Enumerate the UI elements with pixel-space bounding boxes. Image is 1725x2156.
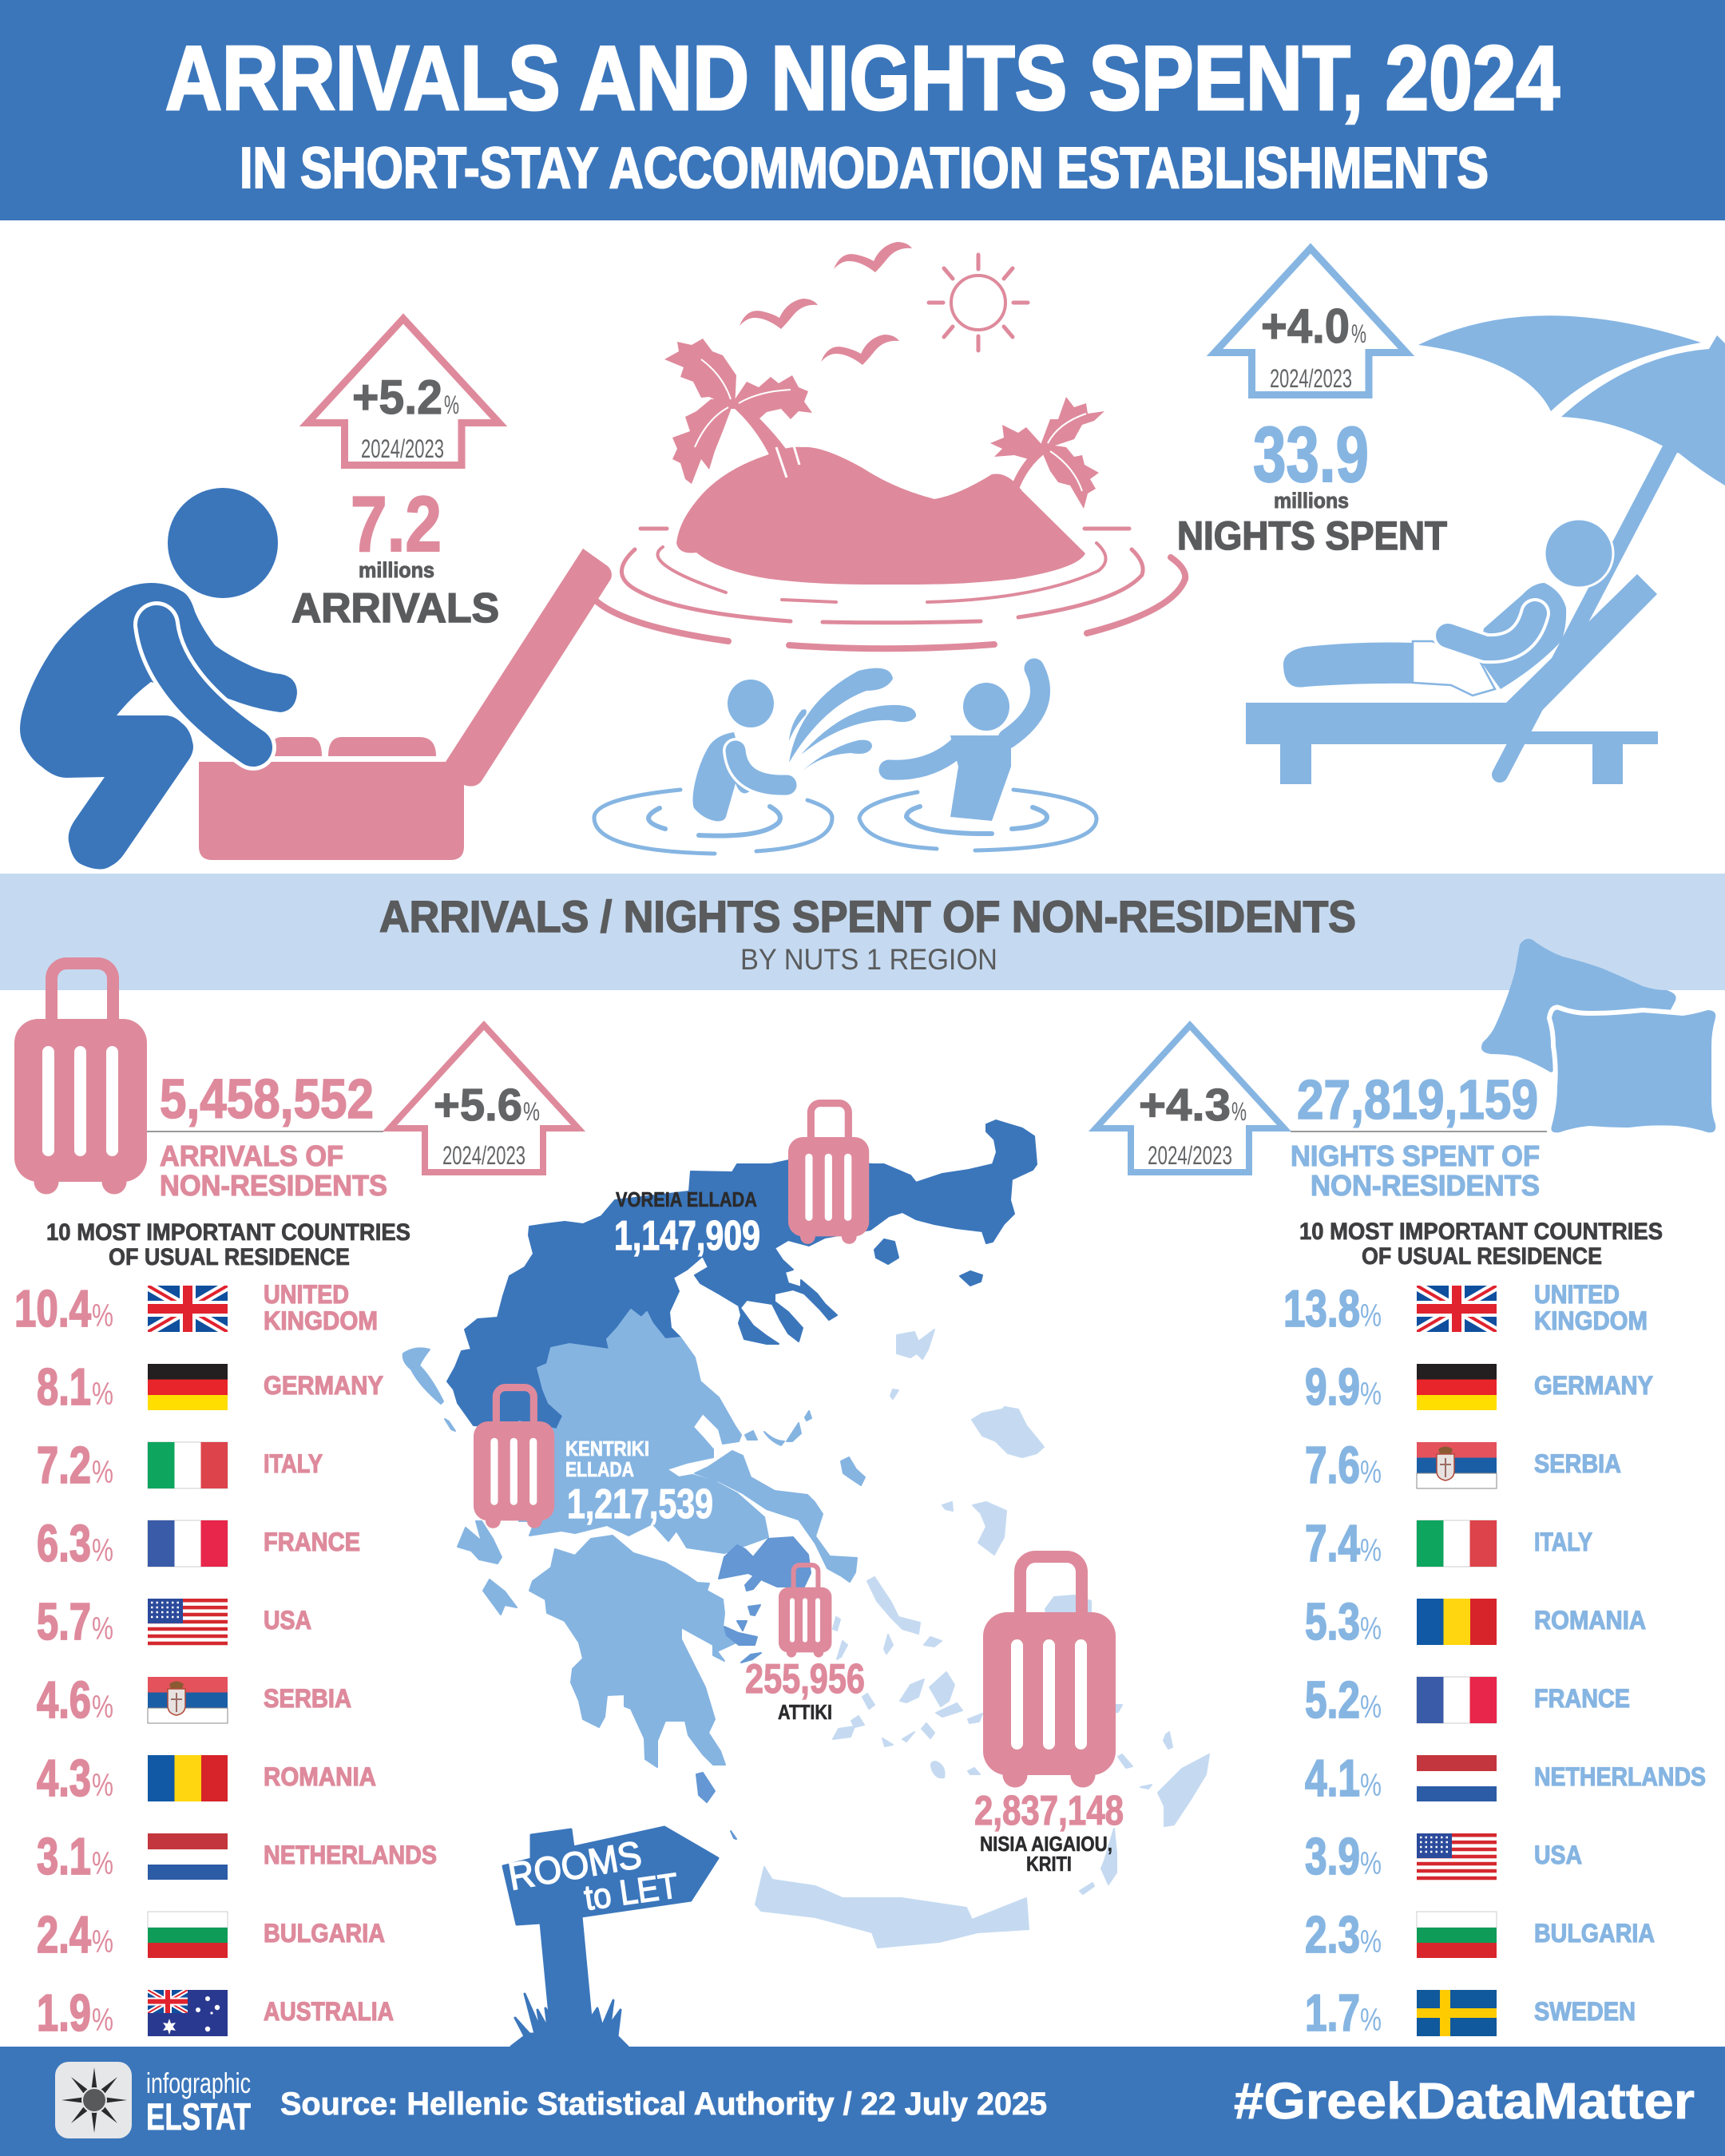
suitcase: Attiki xyxy=(779,1565,831,1658)
row: Serbia: 7.6 xyxy=(1305,1436,1360,1494)
row: Serbia: % xyxy=(92,1690,113,1725)
row: Germany xyxy=(1305,1357,1653,1416)
map label: Kentriki Ellada: ELLADA xyxy=(565,1457,634,1481)
row: United Kingdom: 13.8 xyxy=(1283,1279,1360,1338)
map label: Nisia Aigaiou, Kriti: 2,837,148 xyxy=(974,1788,1124,1834)
logo wordmark xyxy=(146,2067,251,2138)
person xyxy=(20,488,297,870)
arrivals figure xyxy=(291,480,499,632)
left panel: arrivals of non-residents xyxy=(14,963,578,2042)
arrow: non-resident nights change: % xyxy=(1231,1097,1247,1126)
row: Germany: GERMANY xyxy=(1534,1371,1653,1400)
row: France: FRANCE xyxy=(1534,1684,1630,1713)
birds xyxy=(740,242,912,365)
row: Italy: % xyxy=(92,1455,113,1490)
logo wordmark: infographic xyxy=(146,2067,251,2099)
row: Serbia: SERBIA xyxy=(1534,1449,1621,1478)
row: Romania: ROMANIA xyxy=(264,1762,376,1791)
row: Romania: ROMANIA xyxy=(1534,1606,1646,1635)
nights figure: NIGHTS SPENT xyxy=(1177,513,1447,558)
row: United Kingdom: UNITED xyxy=(264,1280,349,1309)
reclining person xyxy=(1283,519,1613,696)
countries heading xyxy=(46,1219,410,1270)
map label: Nisia Aigaiou, Kriti xyxy=(974,1788,1124,1876)
arrow: arrivals change: % xyxy=(444,390,459,419)
countries heading xyxy=(1299,1219,1663,1270)
row: France xyxy=(37,1514,360,1572)
icon: rooms to let sign xyxy=(503,1827,718,2047)
row: Bulgaria: BULGARIA xyxy=(264,1919,385,1948)
region: Kentriki Ellada xyxy=(403,1310,865,1615)
row: Serbia xyxy=(1305,1436,1621,1494)
arrow: non-resident arrivals change: +5.6 xyxy=(434,1080,522,1131)
row: Australia: % xyxy=(92,2003,113,2038)
nights figure: millions xyxy=(1274,489,1349,513)
row: USA: % xyxy=(92,1611,113,1647)
row: France: 5.2 xyxy=(1305,1671,1360,1729)
row: USA: 3.9 xyxy=(1305,1827,1360,1885)
map of Greece xyxy=(403,1120,1209,1948)
map label: Attiki: 255,956 xyxy=(745,1656,865,1702)
row: Italy: ITALY xyxy=(1534,1528,1592,1556)
suitcase xyxy=(199,549,612,860)
countries heading: 10 MOST IMPORTANT COUNTRIES xyxy=(1299,1219,1663,1245)
row: Italy xyxy=(37,1436,323,1494)
suitcase: Nisia Aigaiou, Kriti xyxy=(983,1557,1116,1787)
arrow: non-resident arrivals change: 2024/2023 xyxy=(442,1141,525,1170)
row: Sweden: SWEDEN xyxy=(1534,1997,1636,2026)
row: United Kingdom: KINGDOM xyxy=(1534,1306,1648,1335)
row: Germany: % xyxy=(1360,1377,1382,1412)
row: Italy xyxy=(1305,1514,1592,1572)
icon: pillows xyxy=(1481,939,1715,1132)
icon: rooms to let sign: ROOMS xyxy=(506,1833,644,1899)
row: Italy: 7.4 xyxy=(1305,1514,1360,1572)
sun lounger xyxy=(1246,574,1658,784)
arrivals figure: 7.2 xyxy=(351,480,442,568)
arrow: non-resident arrivals change: % xyxy=(523,1097,540,1126)
country list xyxy=(14,1279,437,2042)
arrow: non-resident arrivals change xyxy=(390,1025,578,1172)
row: USA: % xyxy=(1360,1846,1382,1881)
icon: rooms to let sign: to LET xyxy=(582,1866,680,1918)
row: Romania: 4.3 xyxy=(37,1749,91,1807)
subtitle: IN SHORT-STAY ACCOMMODATION ESTABLISHMENTS xyxy=(240,137,1489,200)
map label: Nisia Aigaiou, Kriti: NISIA AIGAIOU, xyxy=(980,1832,1112,1856)
row: USA: 5.7 xyxy=(37,1592,91,1651)
row: United Kingdom xyxy=(14,1279,378,1338)
map label: Kentriki Ellada xyxy=(565,1437,713,1528)
row: Netherlands xyxy=(1305,1749,1706,1807)
country list xyxy=(1283,1279,1706,2042)
arrow: nights change: % xyxy=(1351,319,1366,348)
arrivals figure: ARRIVALS xyxy=(291,585,499,632)
row: USA xyxy=(37,1592,311,1651)
row: Bulgaria xyxy=(1305,1905,1655,1964)
row: Australia xyxy=(37,1984,394,2042)
row: United Kingdom: UNITED xyxy=(1534,1280,1620,1309)
arrow: nights change: 2024/2023 xyxy=(1270,364,1352,393)
row: United Kingdom: KINGDOM xyxy=(264,1306,378,1335)
arrow: arrivals change: 2024/2023 xyxy=(361,434,444,463)
row: Germany: 9.9 xyxy=(1305,1357,1360,1416)
row: France xyxy=(1305,1671,1630,1729)
row: Sweden: 1.7 xyxy=(1305,1984,1360,2042)
row: Netherlands: 4.1 xyxy=(1305,1749,1360,1807)
section band xyxy=(0,874,1725,990)
row: France: % xyxy=(1360,1690,1382,1725)
countries heading: OF USUAL RESIDENCE xyxy=(109,1244,350,1270)
arrow: nights change: +4.0 xyxy=(1261,299,1350,353)
map label: Kentriki Ellada: KENTRIKI xyxy=(565,1437,649,1460)
row: Italy: 7.2 xyxy=(37,1436,91,1494)
suitcase: Kentriki Ellada xyxy=(474,1388,554,1528)
icon: island with palm trees xyxy=(597,242,1185,648)
countries heading: 10 MOST IMPORTANT COUNTRIES xyxy=(46,1219,410,1246)
suitcase: Voreia Ellada xyxy=(788,1104,869,1244)
row: Germany: GERMANY xyxy=(264,1371,383,1400)
region: Nisia Aigaiou, Kriti xyxy=(755,1330,1209,1948)
row: United Kingdom xyxy=(1283,1279,1648,1338)
nights caption xyxy=(1291,1139,1540,1202)
row: Netherlands: 3.1 xyxy=(37,1827,91,1885)
map label: Voreia Ellada: 1,147,909 xyxy=(614,1213,760,1259)
row: Italy: ITALY xyxy=(264,1449,323,1478)
map label: Voreia Ellada: VOREIA ELLADA xyxy=(616,1187,757,1211)
row: Sweden xyxy=(1305,1984,1636,2042)
row: Romania: % xyxy=(1360,1611,1382,1647)
arrow: arrivals change: +5.2 xyxy=(352,371,442,424)
row: USA: USA xyxy=(1534,1841,1582,1869)
arrow: non-resident nights change xyxy=(1096,1025,1284,1172)
row: Netherlands: % xyxy=(92,1846,113,1881)
row: Australia: 1.9 xyxy=(37,1984,91,2042)
region: Peloponnisos xyxy=(529,1536,736,1767)
row: Romania xyxy=(1305,1592,1646,1651)
row: United Kingdom: % xyxy=(92,1298,113,1334)
arrow: non-resident nights change: 2024/2023 xyxy=(1148,1141,1232,1170)
arrivals figure: millions xyxy=(359,558,434,582)
row: Romania xyxy=(37,1749,376,1807)
map label: Attiki: ATTIKI xyxy=(778,1700,832,1724)
row: Bulgaria: BULGARIA xyxy=(1534,1919,1655,1948)
region: Voreia Ellada xyxy=(447,1120,1037,1429)
arrow: non-resident nights change: +4.3 xyxy=(1139,1080,1231,1131)
region: Attiki xyxy=(696,1537,811,1839)
row: Netherlands xyxy=(37,1827,437,1885)
nights caption: NON-RESIDENTS xyxy=(1311,1169,1540,1202)
row: Australia: AUSTRALIA xyxy=(264,1997,394,2026)
nights figure xyxy=(1177,410,1447,558)
row: Serbia: % xyxy=(1360,1455,1382,1490)
icon: large suitcase xyxy=(14,963,147,1195)
icon: person on sun lounger under umbrella xyxy=(1246,315,1725,784)
map label: Attiki xyxy=(745,1656,865,1724)
icon: child waving in water xyxy=(859,668,1096,850)
row: United Kingdom: 10.4 xyxy=(14,1279,91,1338)
row: Netherlands: % xyxy=(1360,1768,1382,1803)
right panel: nights spent of non-residents xyxy=(1096,939,1715,2042)
map label: Kentriki Ellada: 1,217,539 xyxy=(567,1481,713,1528)
arrow: arrivals change xyxy=(307,319,499,465)
icon: child splashing water xyxy=(594,668,916,854)
row: Italy: % xyxy=(1360,1533,1382,1568)
arrivals total: 5,458,552 xyxy=(160,1068,374,1130)
sun xyxy=(929,255,1028,351)
umbrella xyxy=(1418,315,1725,775)
nights figure: 33.9 xyxy=(1253,410,1369,498)
row: USA: USA xyxy=(264,1606,311,1635)
row: Serbia xyxy=(37,1671,351,1729)
map label: Voreia Ellada xyxy=(614,1187,760,1259)
row: Germany xyxy=(37,1357,383,1416)
row: Bulgaria xyxy=(37,1905,385,1964)
palm trees xyxy=(664,339,1104,509)
source: Source: Hellenic Statistical Authority / 22 July 2025 xyxy=(280,2087,1047,2122)
row: Netherlands: NETHERLANDS xyxy=(1534,1762,1706,1791)
arrow: nights change xyxy=(1215,248,1406,394)
arrivals caption: NON-RESIDENTS xyxy=(160,1169,387,1202)
row: France: FRANCE xyxy=(264,1528,360,1556)
row: Netherlands: NETHERLANDS xyxy=(264,1841,437,1869)
row: Bulgaria: 2.4 xyxy=(37,1905,91,1964)
icon: person packing suitcase xyxy=(20,488,612,870)
divider line xyxy=(1291,1131,1557,1132)
row: Sweden: % xyxy=(1360,2003,1382,2038)
header band xyxy=(0,0,1725,220)
logo wordmark: ELSTAT xyxy=(146,2095,251,2138)
logo: ELSTAT xyxy=(55,2062,132,2138)
water ripples xyxy=(597,529,1185,648)
row: Serbia: SERBIA xyxy=(264,1684,351,1713)
row: Bulgaria: % xyxy=(1360,1924,1382,1960)
nights caption: NIGHTS SPENT OF xyxy=(1291,1139,1540,1172)
row: Romania: 5.3 xyxy=(1305,1592,1360,1651)
row: France: % xyxy=(92,1533,113,1568)
map label: Nisia Aigaiou, Kriti: KRITI xyxy=(1026,1852,1072,1876)
arrivals caption: ARRIVALS OF xyxy=(160,1139,343,1172)
row: France: 6.3 xyxy=(37,1514,91,1572)
row: United Kingdom: % xyxy=(1360,1298,1382,1334)
row: Bulgaria: % xyxy=(92,1924,113,1960)
row: USA xyxy=(1305,1827,1582,1885)
row: Germany: % xyxy=(92,1377,113,1412)
hashtag: #GreekDataMatter xyxy=(1234,2072,1695,2130)
row: Germany: 8.1 xyxy=(37,1357,91,1416)
arrivals caption xyxy=(160,1139,387,1202)
countries heading: OF USUAL RESIDENCE xyxy=(1362,1243,1602,1270)
row: Serbia: 4.6 xyxy=(37,1671,91,1729)
row: Romania: % xyxy=(92,1768,113,1803)
section subheading: BY NUTS 1 REGION xyxy=(740,943,997,976)
nights total: 27,819,159 xyxy=(1297,1068,1538,1131)
island hill xyxy=(676,447,1085,585)
divider line xyxy=(147,1131,383,1132)
footer band xyxy=(0,2047,1725,2156)
row: Bulgaria: 2.3 xyxy=(1305,1905,1360,1964)
section heading: ARRIVALS / NIGHTS SPENT OF NON-RESIDENTS xyxy=(379,891,1356,941)
